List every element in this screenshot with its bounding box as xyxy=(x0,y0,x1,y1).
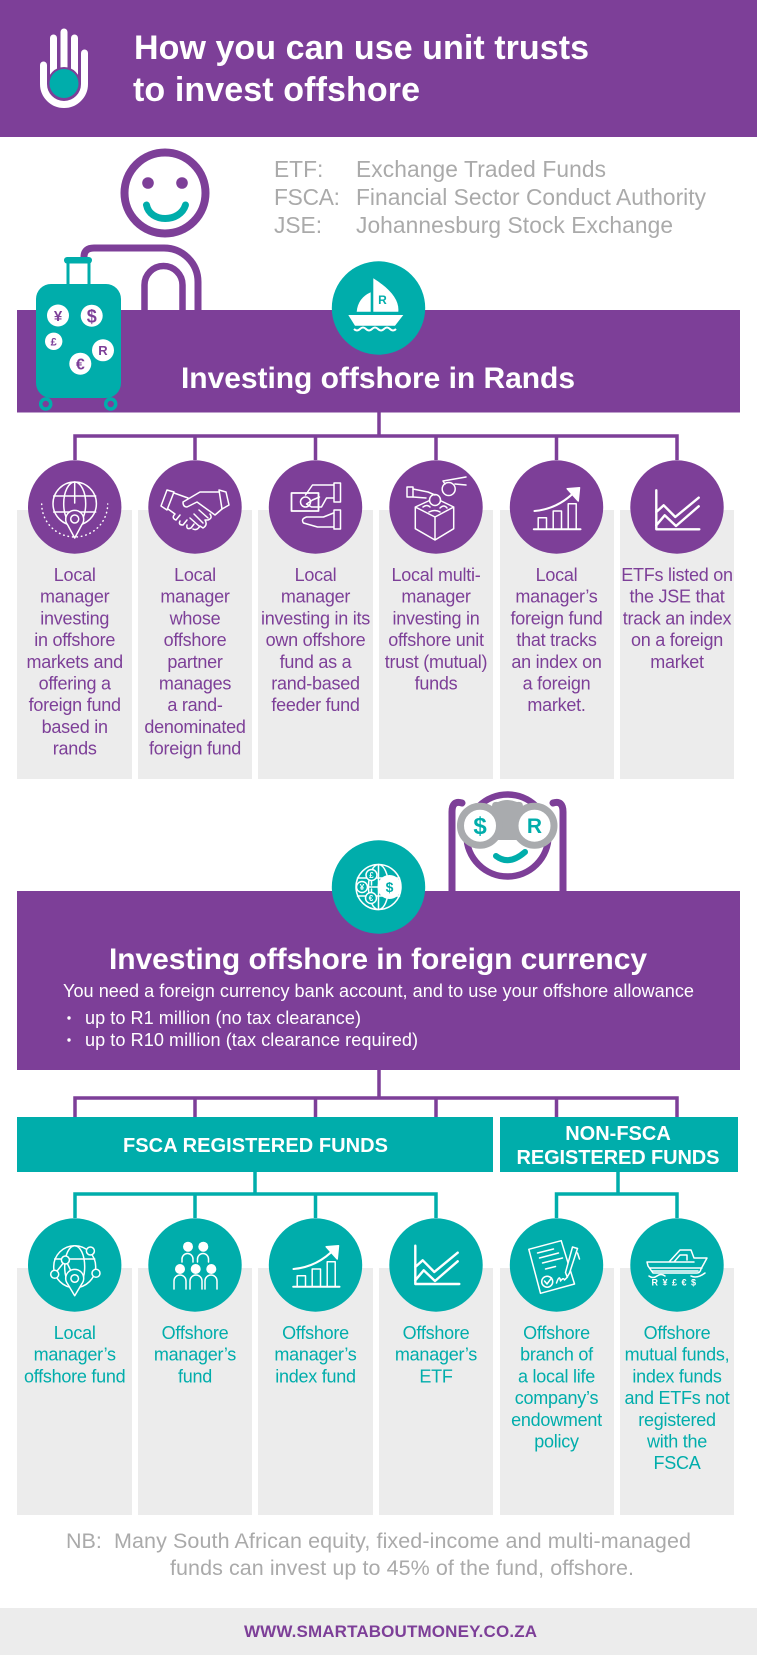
icon: globe with currencies: £ xyxy=(369,871,374,880)
text: foreign option 3: Offshore xyxy=(282,1323,349,1343)
header band xyxy=(0,0,757,137)
text: rand option 6: track an index xyxy=(623,608,732,628)
character: person with binoculars: $ xyxy=(473,813,487,840)
icon: sailing boat xyxy=(332,261,425,355)
text: foreign option 5: company’s xyxy=(515,1388,598,1408)
text: allowance bullets xyxy=(67,1008,418,1050)
icon: signed policy document xyxy=(529,1241,580,1293)
icon: globe network with pin xyxy=(51,1246,100,1296)
icon: line chart xyxy=(656,490,699,529)
panel: rand option 4 xyxy=(379,460,493,779)
text: foreign option 6: Offshore xyxy=(644,1323,711,1343)
title: to invest offshore xyxy=(133,71,420,109)
text: rand option 2: manages xyxy=(159,674,231,694)
text: foreign option 2: manager’s xyxy=(154,1345,236,1365)
text: rand option 6: ETFs listed on xyxy=(621,565,733,585)
text: rand option 3: fund as a xyxy=(280,652,353,672)
text: rand option 4: Local multi- xyxy=(391,565,481,585)
icon: handshake xyxy=(161,490,229,530)
icon: suitcase with currencies: $ xyxy=(87,306,97,326)
text: foreign option 5: a local life xyxy=(518,1366,595,1386)
text: foreign option 3: manager’s xyxy=(274,1345,357,1365)
text: rand option 2: denominated xyxy=(144,717,246,737)
panel: rand option 5 xyxy=(500,460,614,779)
text: rand option 1: investing xyxy=(40,608,109,628)
category: FSCA registered funds xyxy=(17,1117,493,1172)
text: foreign option 1: offshore fund xyxy=(24,1366,125,1386)
panel: foreign option 6 xyxy=(620,1218,734,1515)
text: rand option 2: partner xyxy=(167,652,223,672)
note: NB offshore limit: Many South African equity, fixed-income and multi-managed xyxy=(114,1529,691,1553)
text: rand option 3: rand-based xyxy=(271,674,360,694)
text: rand option 2: offshore xyxy=(164,630,227,650)
text: rand option 4: offshore unit xyxy=(388,630,484,650)
banner: investing offshore in foreign currency xyxy=(17,891,740,1070)
icon: globe with currencies xyxy=(332,840,425,934)
text: rand option 5: Local xyxy=(536,565,577,585)
text: allowance bullets: up to R10 million (tax clearance required) xyxy=(85,1030,418,1050)
abbreviations legend: Exchange Traded Funds xyxy=(356,156,606,182)
text: foreign option 4: Offshore xyxy=(403,1323,470,1343)
panel: foreign option 1 xyxy=(17,1218,132,1515)
text: rand option 6: market xyxy=(650,652,704,672)
icon: hands exchanging cash xyxy=(292,483,340,529)
text: rand option 1: foreign fund xyxy=(29,695,121,715)
text: rand option 2: manager xyxy=(160,587,230,607)
category: non-FSCA registered funds: NON-FSCA xyxy=(565,1123,671,1145)
text: foreign option 6: FSCA xyxy=(653,1453,701,1473)
category: non-FSCA registered funds: REGISTERED FUNDS xyxy=(516,1147,720,1169)
text: foreign option 5: policy xyxy=(534,1432,579,1452)
text: rand option 5: an index on xyxy=(511,652,602,672)
text: foreign option 6: and ETFs not xyxy=(624,1388,730,1408)
icon: hand holding coin xyxy=(44,32,84,104)
icon: rising bar chart xyxy=(534,488,580,529)
connector: non-FSCA funds xyxy=(556,1172,677,1218)
icon: group of people xyxy=(174,1242,217,1289)
panel: foreign option 3 xyxy=(258,1218,373,1515)
text: rand option 6: the JSE that xyxy=(629,587,725,607)
text: foreign option 5: branch of xyxy=(520,1345,594,1365)
panel: foreign option 2 xyxy=(138,1218,252,1515)
title: How you can use unit trusts xyxy=(134,29,589,67)
text: rand option 5: foreign fund xyxy=(510,608,603,628)
icon: globe with currencies: ¥ xyxy=(360,883,365,892)
text: allowance bullets: up to R1 million (no tax clearance) xyxy=(85,1008,361,1028)
note: NB offshore limit: funds can invest up to 45% of the fund, offshore. xyxy=(170,1556,634,1580)
text: rand option 1: rands xyxy=(53,739,97,759)
icon: sailing boat: R xyxy=(378,293,387,307)
text: rand option 2: a rand- xyxy=(167,695,223,715)
text: rand option 3: investing in its xyxy=(261,608,370,628)
icon: globe with pin xyxy=(42,482,108,538)
icon: rising bar chart xyxy=(293,1246,340,1287)
text: foreign account requirement: You need a foreign currency bank account, and to use your offshore allowance xyxy=(63,981,694,1001)
text: rand option 5: market. xyxy=(527,695,586,715)
abbreviations legend xyxy=(274,156,707,238)
text: foreign option 4: manager’s xyxy=(395,1345,477,1365)
text: foreign option 1: manager’s xyxy=(34,1345,116,1365)
connector: FSCA funds xyxy=(75,1172,436,1218)
text: rand option 1: Local xyxy=(54,565,96,585)
text: foreign option 2: Offshore xyxy=(162,1323,229,1343)
note: NB offshore limit: NB: xyxy=(66,1529,102,1553)
text: rand option 2: whose xyxy=(169,608,221,628)
icon: suitcase with currencies: £ xyxy=(51,336,57,348)
panel: rand option 1 xyxy=(17,460,132,779)
heading: investing offshore in rands: Investing offshore in Rands xyxy=(181,362,575,395)
text: foreign option 6: index funds xyxy=(632,1366,722,1386)
note: NB offshore limit xyxy=(66,1529,691,1580)
panel: foreign option 4 xyxy=(379,1218,493,1515)
abbreviations legend: Johannesburg Stock Exchange xyxy=(356,212,673,238)
icon: globe with currencies: $ xyxy=(386,879,394,895)
icon: boat and currencies: R¥£€$ xyxy=(651,1278,701,1288)
footer xyxy=(0,1608,757,1655)
text: rand option 1: markets and xyxy=(27,652,123,672)
panel: rand option 2 xyxy=(138,460,252,779)
abbreviations legend: ETF: xyxy=(274,156,323,182)
text: foreign option 2: fund xyxy=(178,1366,212,1386)
text: foreign option 6: mutual funds, xyxy=(625,1345,729,1365)
text: foreign option 4: ETF xyxy=(419,1366,453,1386)
text: rand option 2: Local xyxy=(174,565,216,585)
text: foreign option 5: endowment xyxy=(511,1410,602,1430)
panel: rand option 6 xyxy=(620,460,734,779)
character: smiling person xyxy=(84,152,206,312)
text: foreign option 6: with the xyxy=(646,1432,707,1452)
text: rand option 4: manager xyxy=(401,587,471,607)
text: rand option 5: a foreign xyxy=(523,674,590,694)
icon: suitcase with currencies: R xyxy=(98,343,108,358)
character: person with binoculars xyxy=(452,794,563,892)
text: rand option 5: manager’s xyxy=(515,587,598,607)
text: rand option 5: that tracks xyxy=(516,630,597,650)
text: rand option 3: own offshore xyxy=(266,630,366,650)
text: foreign option 1: Local xyxy=(54,1323,96,1343)
text: rand option 4: funds xyxy=(415,674,458,694)
text: foreign option 6: registered xyxy=(638,1410,716,1430)
banner: investing offshore in rands xyxy=(17,310,740,412)
text: rand option 3: Local xyxy=(295,565,336,585)
character: person with binoculars: R xyxy=(527,815,542,838)
text: rand option 6: on a foreign xyxy=(631,630,723,650)
text: rand option 1: manager xyxy=(40,587,110,607)
icon: coins into box xyxy=(407,477,466,540)
icon: suitcase with currencies: € xyxy=(76,356,85,374)
text: rand option 2: foreign fund xyxy=(149,739,241,759)
footer: WWW.SMARTABOUTMONEY.CO.ZA xyxy=(244,1622,537,1641)
icon: globe with currencies: € xyxy=(369,894,374,903)
connector: foreign currency banner to fund categories xyxy=(75,1070,677,1117)
icon: suitcase with currencies: ¥ xyxy=(54,308,63,325)
panel: rand option 3 xyxy=(258,460,373,779)
abbreviations legend: JSE: xyxy=(274,212,322,238)
category: non-FSCA registered funds xyxy=(500,1117,738,1172)
panel: foreign option 5 xyxy=(500,1218,614,1515)
abbreviations legend: FSCA: xyxy=(274,184,340,210)
text: rand option 1: based in xyxy=(42,717,108,737)
text: foreign option 5: Offshore xyxy=(523,1323,590,1343)
icon: boat and currencies xyxy=(647,1250,707,1288)
icon: suitcase with currencies xyxy=(36,257,121,409)
heading: investing offshore in foreign currency: Investing offshore in foreign currency xyxy=(109,943,647,976)
text: rand option 4: trust (mutual) xyxy=(385,652,487,672)
category: FSCA registered funds: FSCA REGISTERED FUNDS xyxy=(123,1135,388,1157)
abbreviations legend: Financial Sector Conduct Authority xyxy=(356,184,707,210)
text: rand option 3: manager xyxy=(281,587,350,607)
text: rand option 4: investing in xyxy=(392,608,480,628)
text: rand option 1: in offshore xyxy=(34,630,115,650)
text: rand option 3: feeder fund xyxy=(271,695,360,715)
text: rand option 1: offering a xyxy=(39,674,112,694)
icon: line chart xyxy=(415,1246,459,1284)
text: foreign option 3: index fund xyxy=(275,1366,356,1386)
connector: rands banner to options xyxy=(75,412,677,460)
